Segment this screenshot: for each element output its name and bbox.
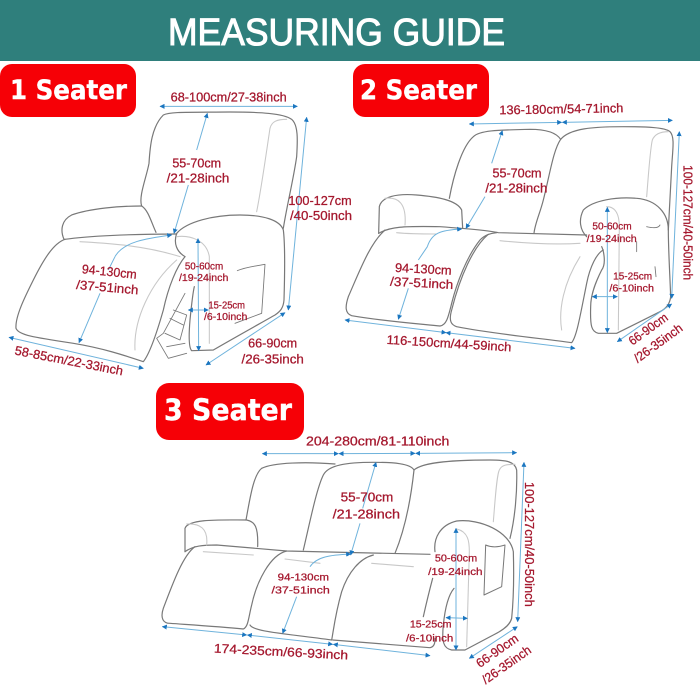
measurement labels: /21-28inch <box>333 507 400 521</box>
dimension arrows <box>162 453 524 658</box>
measurement labels: 66-90cm <box>626 310 671 348</box>
measurement labels: 204-280cm/81-110inch <box>306 435 449 449</box>
sofa outline <box>346 127 673 343</box>
measurement labels: 94-130cm <box>395 261 452 278</box>
measurement labels: 100-127cm/40-50inch <box>680 165 694 280</box>
measurement labels: 15-25cm <box>208 300 245 311</box>
diagram: 2 seater sofa <box>345 101 694 366</box>
diagram: 1 seater recliner <box>9 91 352 378</box>
measurement labels: 58-85cm/22-33inch <box>14 344 124 378</box>
measurement labels: /6-10inch <box>204 312 248 323</box>
measurement labels: /19-24inch <box>587 234 637 245</box>
dimension arrows <box>9 106 307 368</box>
measurement labels: /6-10inch <box>406 634 454 645</box>
measurement labels: /19-24inch <box>179 273 229 284</box>
measurement labels: 50-60cm <box>185 261 223 272</box>
measurement labels: 15-25cm <box>613 271 652 282</box>
measurement labels: /19-24inch <box>428 567 483 578</box>
badge: 1 Seater <box>0 64 136 117</box>
measurement labels: 55-70cm <box>492 166 541 180</box>
measurement labels: 94-130cm <box>278 573 329 584</box>
badge: 3 Seater <box>156 383 304 440</box>
dimension arrows <box>345 120 679 348</box>
measurement labels: /26-35inch <box>631 321 685 366</box>
measurement labels: 66-90cm <box>474 631 521 671</box>
title: MEASURING GUIDE <box>168 12 505 54</box>
recliner outline <box>16 112 297 362</box>
diagram: 3 seater sofa <box>162 435 536 687</box>
measurement labels: 100-127cm <box>288 194 352 208</box>
measurement labels: /6-10inch <box>609 284 654 295</box>
header banner <box>0 0 700 61</box>
measurement labels <box>214 435 536 687</box>
measurement labels: /40-50inch <box>290 209 352 223</box>
measurement labels: /26-35inch <box>241 352 304 366</box>
measurement labels: 50-60cm <box>435 554 477 565</box>
measurement labels: 66-90cm <box>248 337 297 351</box>
measurement labels: /21-28inch <box>485 182 547 196</box>
measurement labels: /37-51inch <box>76 278 139 297</box>
measurement labels: 100-127cm/40-50inch <box>522 482 536 607</box>
measurement labels: 68-100cm/27-38inch <box>171 91 287 105</box>
badge: 2 Seater <box>353 64 489 117</box>
measurement labels: /21-28inch <box>167 172 229 186</box>
measurement labels: 55-70cm <box>341 491 393 505</box>
measurement labels: 15-25cm <box>410 620 451 631</box>
measurement labels: /37-51inch <box>390 275 454 292</box>
measurement labels: 116-150cm/44-59inch <box>386 333 512 354</box>
measurement labels <box>386 101 694 366</box>
measurement labels: 136-180cm/54-71inch <box>499 101 623 117</box>
measurement labels: /37-51inch <box>271 585 330 596</box>
measurement labels <box>14 91 352 378</box>
sofa outline <box>162 460 517 650</box>
badge: 2 Seater: 2 Seater <box>360 75 478 106</box>
measurement labels: /26-35inch <box>479 643 534 687</box>
measurement labels: 50-60cm <box>592 221 632 232</box>
badge: 3 Seater: 3 Seater <box>164 393 293 427</box>
measurement labels: 55-70cm <box>172 156 221 170</box>
badge: 1 Seater: 1 Seater <box>10 75 128 106</box>
measurement labels: 174-235cm/66-93inch <box>214 641 348 663</box>
measurement labels: 94-130cm <box>81 262 137 282</box>
